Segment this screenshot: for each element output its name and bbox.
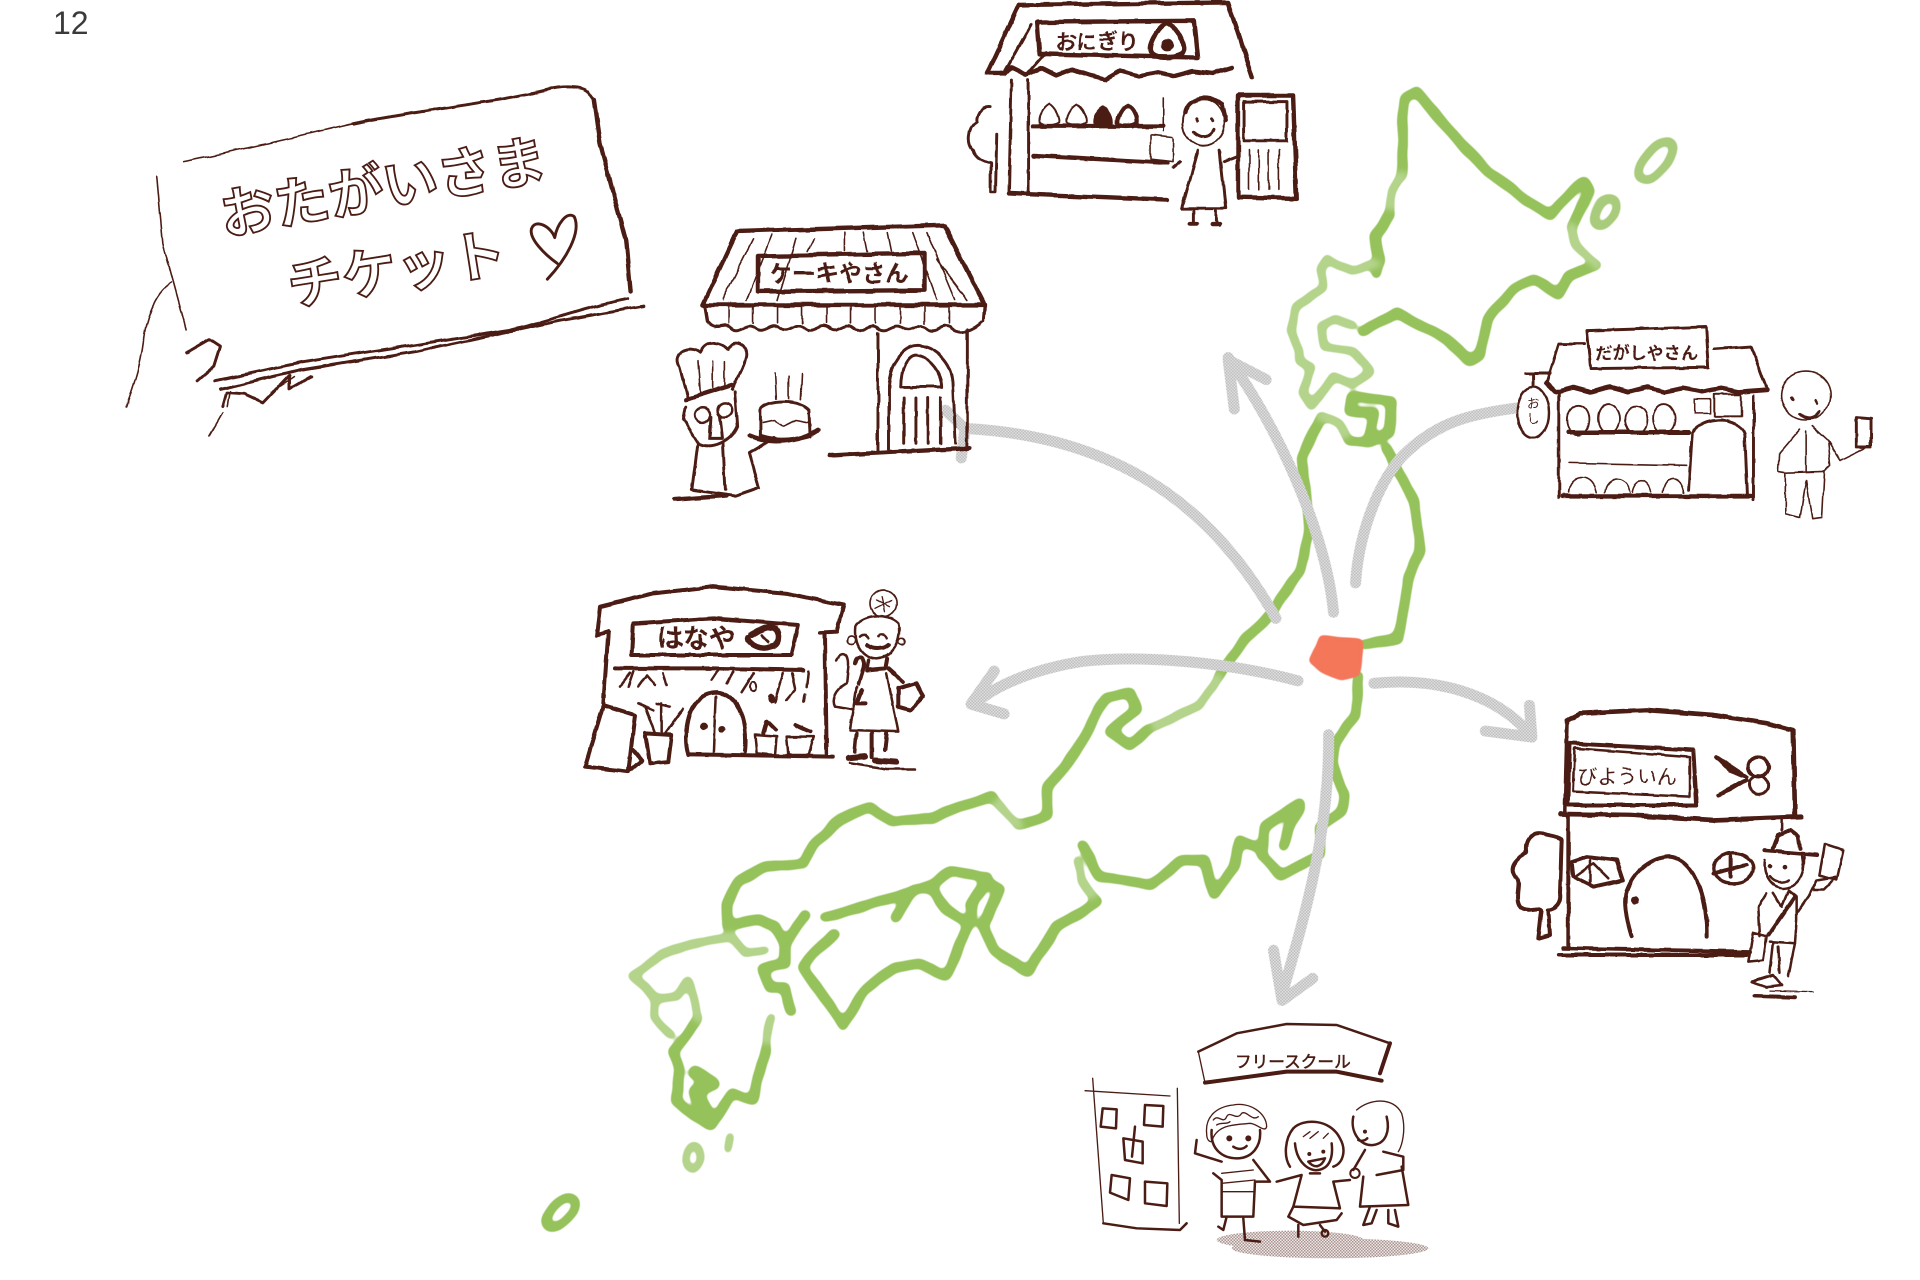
- florist: [834, 590, 923, 769]
- ticket held in hand: チケット: [283, 222, 511, 318]
- sign: [1568, 743, 1697, 805]
- tree: [1513, 833, 1562, 938]
- customer with ticket: [1748, 817, 1843, 997]
- sign: [1587, 327, 1708, 369]
- door: [1625, 857, 1707, 937]
- cake: [749, 373, 818, 441]
- icon: scissors: [1717, 757, 1768, 795]
- onigiri shop: [969, 2, 1297, 224]
- customer holding ticket: [1778, 371, 1871, 519]
- shopkeeper: [1151, 98, 1237, 224]
- sign: [758, 253, 924, 291]
- roof: [703, 225, 984, 332]
- beauty salon: [1513, 710, 1843, 997]
- ticket held in hand: [126, 87, 643, 436]
- highlight: Fukushima region: [1309, 636, 1363, 681]
- Honshu: [726, 396, 1420, 1011]
- dagashi shop: [1517, 327, 1871, 519]
- sign: ケーキやさん: [769, 261, 909, 287]
- building: [1558, 710, 1802, 955]
- roof: [597, 587, 843, 635]
- free school: [1085, 1024, 1428, 1258]
- icon: heart: [531, 215, 576, 279]
- walls and shelf: [603, 632, 833, 757]
- arrow to flower shop: [971, 659, 1298, 714]
- arrow to dagashi shop: [1356, 408, 1518, 583]
- northern islands: [1590, 137, 1679, 230]
- child: boy: [1195, 1104, 1270, 1242]
- stall structure: [1559, 392, 1753, 500]
- tree: [969, 106, 997, 192]
- sign: おにぎり: [1056, 30, 1139, 54]
- child: girl: [1277, 1122, 1350, 1237]
- Shikoku: [803, 889, 970, 1025]
- ground shading: [1217, 1231, 1428, 1258]
- wall and door: [829, 329, 970, 456]
- hanging plants: [620, 670, 808, 703]
- sign: [1037, 21, 1198, 58]
- hand: [126, 283, 312, 436]
- map: Japan outline: [542, 92, 1679, 1231]
- southern islands: [542, 1136, 730, 1231]
- Hokkaido: [1291, 92, 1597, 405]
- signboard: [585, 705, 642, 772]
- sign: フリースクール: [1235, 1052, 1351, 1071]
- roof: [1547, 344, 1767, 392]
- child: older girl: [1350, 1101, 1408, 1227]
- flower pots: [638, 703, 813, 763]
- cake shop: [675, 225, 984, 500]
- lantern: し: [1527, 411, 1539, 425]
- notice board: [1085, 1078, 1187, 1230]
- stall: [1009, 80, 1167, 200]
- page number: 12: [53, 5, 89, 41]
- arrow to cake shop: [945, 410, 1276, 618]
- arrow to beauty salon: [1374, 682, 1532, 737]
- door: [1238, 96, 1297, 198]
- lantern: お: [1527, 397, 1539, 411]
- arrow to free school: [1273, 735, 1329, 1000]
- chef: [675, 343, 774, 500]
- Kyushu: [633, 936, 771, 1125]
- sign: びよういん: [1577, 765, 1677, 788]
- ticket outline: [157, 87, 643, 389]
- roof: [987, 2, 1253, 80]
- sign: [632, 618, 798, 655]
- arrow to onigiri shop: [1228, 358, 1333, 612]
- jars: [1567, 404, 1675, 435]
- lantern: [1517, 373, 1550, 438]
- door: [686, 693, 746, 755]
- sign: [1198, 1024, 1390, 1083]
- sign: だがしやさん: [1596, 343, 1698, 363]
- flower shop: [585, 587, 923, 772]
- ticket text: おたがいさま: [215, 129, 552, 247]
- windows: [1572, 853, 1753, 887]
- sign: はなや: [657, 623, 735, 653]
